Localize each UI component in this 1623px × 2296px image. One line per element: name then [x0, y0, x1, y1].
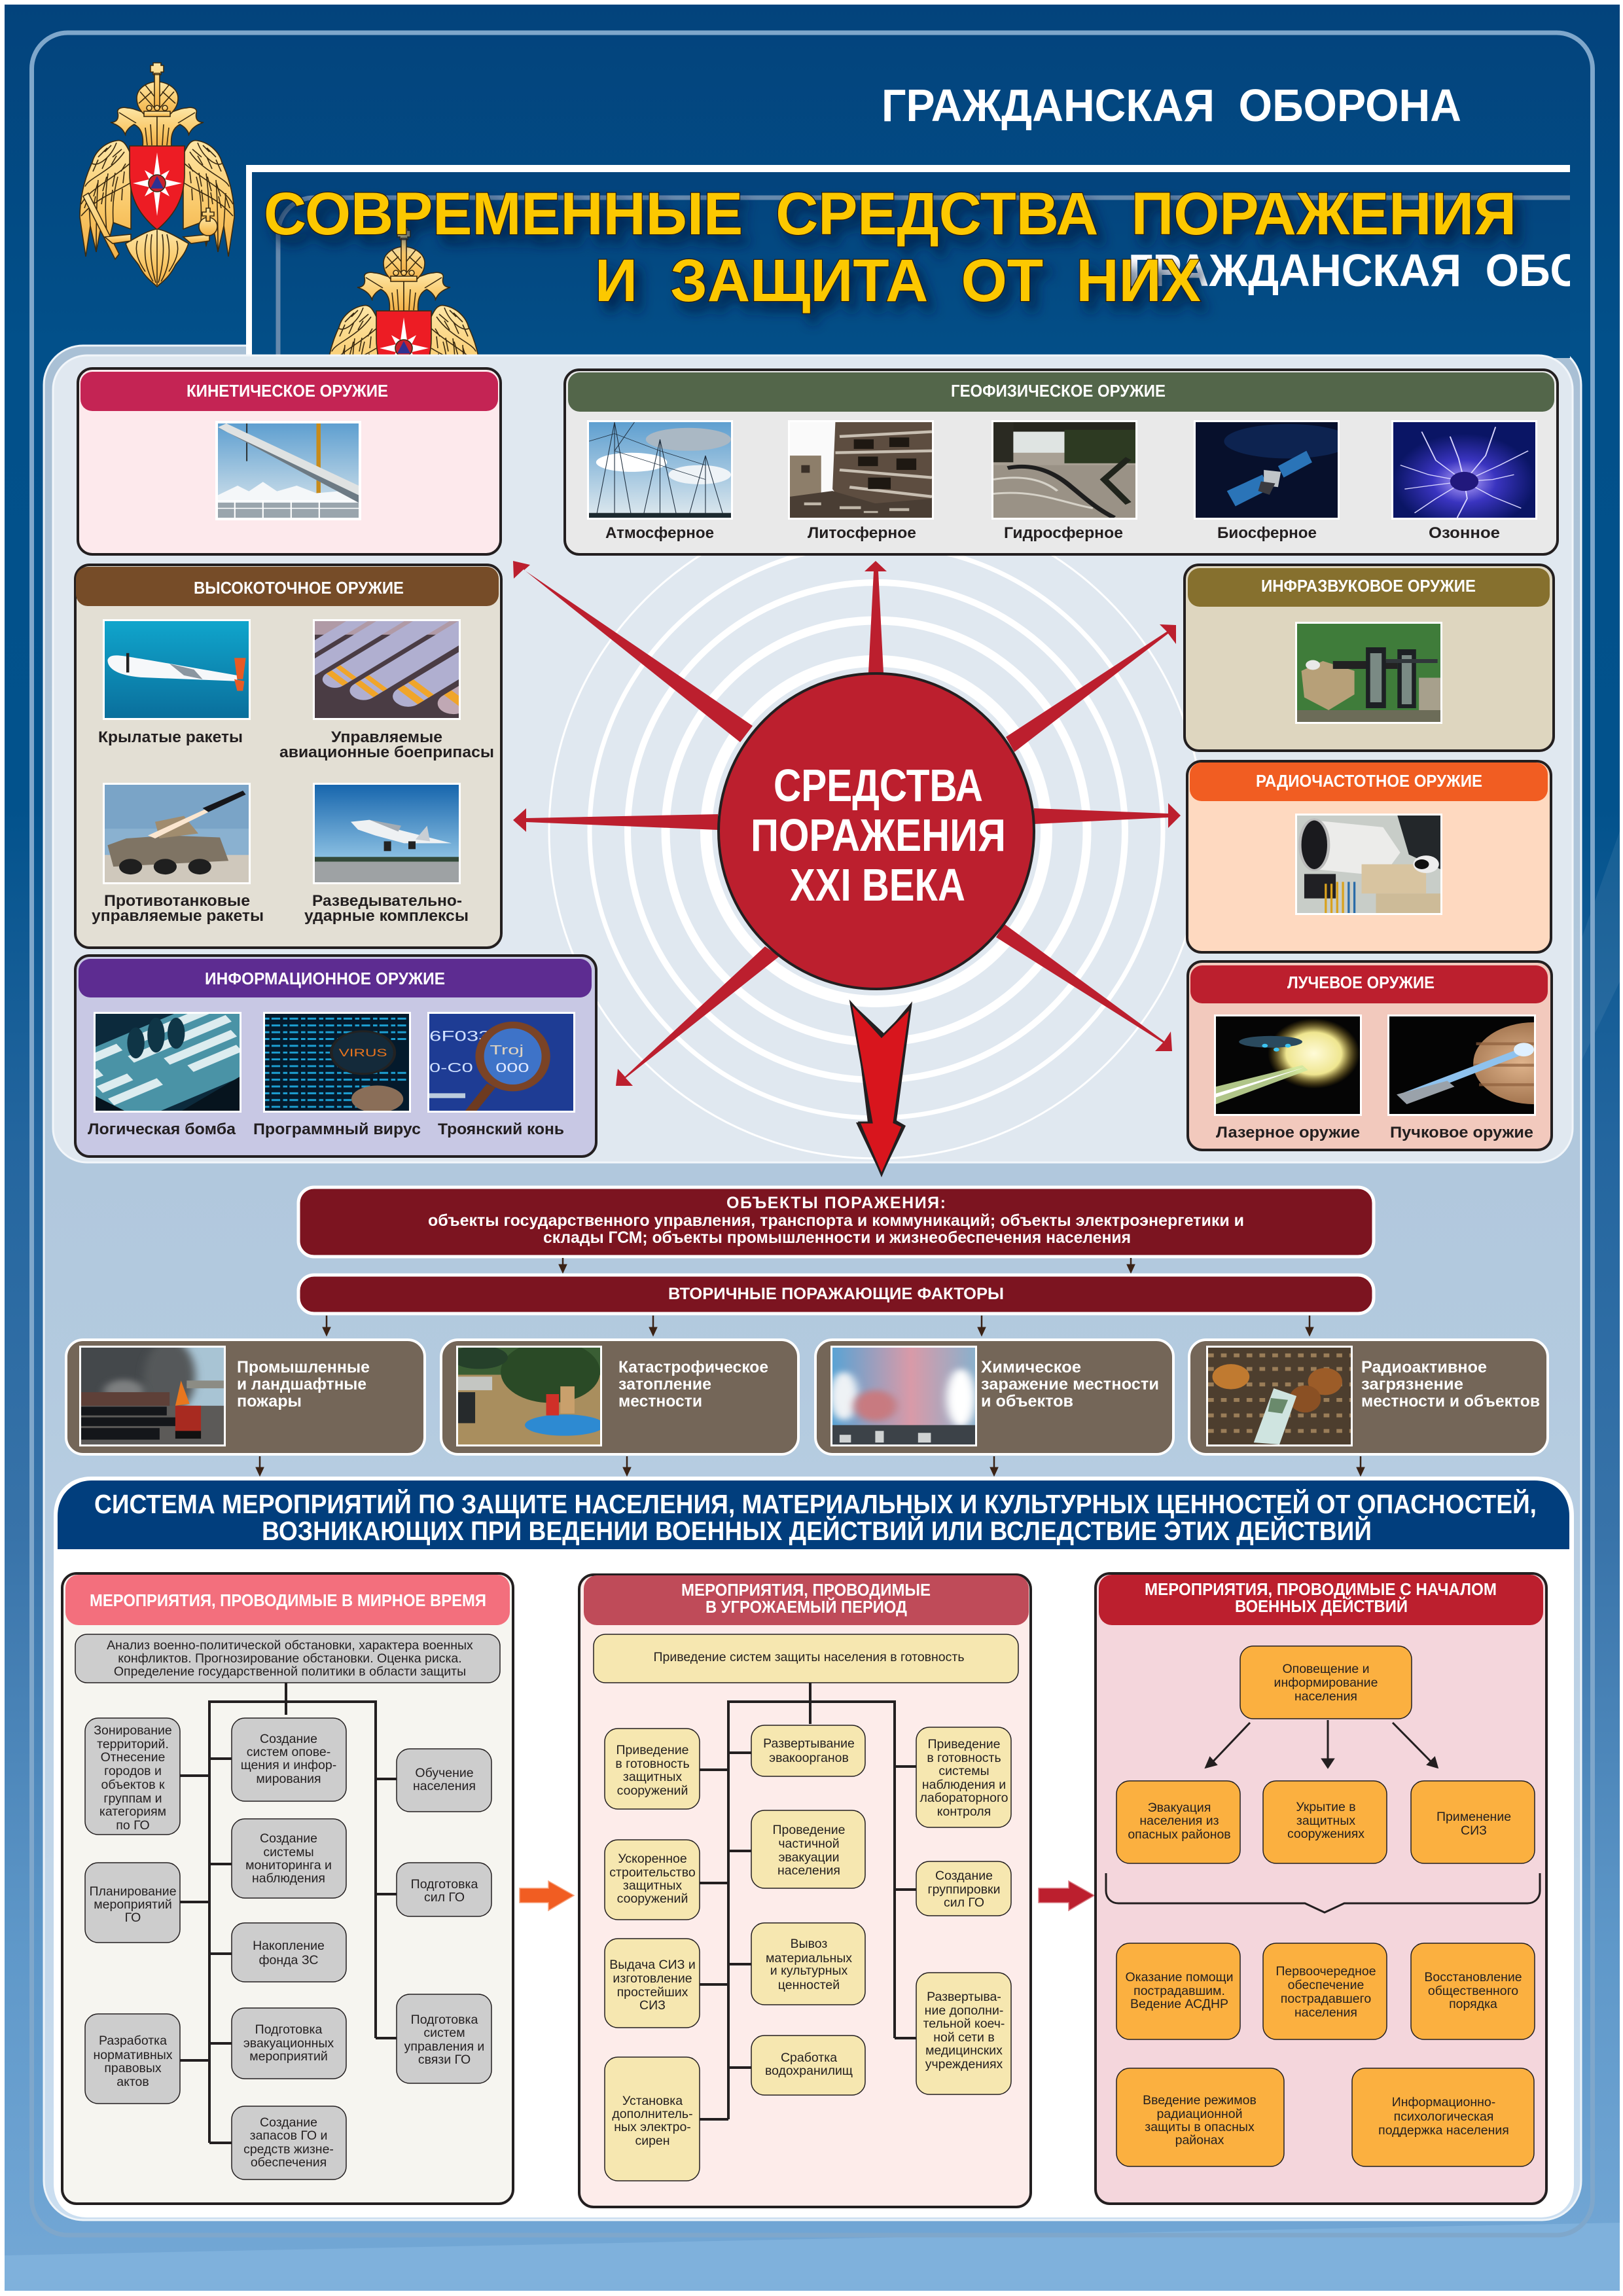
box: hospital beds: ние дополни- — [925, 2003, 1003, 2018]
box: psychological support: психологическая — [1394, 2109, 1493, 2124]
box: reservoirs: Сработка — [781, 2051, 837, 2065]
photo: flood — [451, 1341, 605, 1446]
box: control systems: управления и — [404, 2039, 484, 2054]
box: reservoirs: водохранилищ — [765, 2064, 853, 2078]
labels: high precision types: Управляемые — [331, 728, 442, 746]
labels: high precision types — [92, 728, 494, 925]
box: zoning: объектов к — [101, 1778, 165, 1792]
box: evacuation — [1116, 1781, 1240, 1863]
panel: wartime measures: МЕРОПРИЯТИЯ, ПРОВОДИМЫЕ С НАЧАЛОМ — [1145, 1579, 1497, 1599]
panel: information weapon — [52, 956, 596, 1157]
box: aid: Оказание помощи — [1125, 1970, 1234, 1984]
box: removal of valuables: материальных — [766, 1951, 852, 1965]
arrows to protection system — [256, 1456, 1364, 1476]
box: warning: Оповещение и — [1282, 1662, 1370, 1676]
card: chemical contamination: заражение местности — [981, 1375, 1159, 1393]
secondary factors box: ВТОРИЧНЫЕ ПОРАЖАЮЩИЕ ФАКТОРЫ — [668, 1285, 1004, 1303]
box: supply: населения — [1294, 2005, 1357, 2020]
arrows to secondary factors — [559, 1258, 1135, 1273]
labels: information types: Программный вирус — [253, 1121, 421, 1138]
arrow: south-west — [616, 946, 779, 1086]
heading: civil defence: ГРАЖДАНСКАЯ ОБОРОНА — [882, 80, 1461, 131]
box: protective equipment: простейших — [617, 1985, 688, 2000]
box: supply: обеспечение — [1288, 1978, 1364, 1992]
photo: trojan: 0-C0 — [429, 1060, 473, 1075]
box: evacuation: опасных районов — [1128, 1827, 1231, 1842]
box: reserves — [232, 2106, 346, 2179]
panel: geophysical weapon: ГЕОФИЗИЧЕСКОЕ ОРУЖИЕ — [951, 381, 1166, 401]
brace — [1106, 1873, 1540, 1912]
box: evacuation planning: эвакуационных — [243, 2036, 334, 2051]
box: evacuation planning: мероприятий — [249, 2049, 328, 2064]
panel: information weapon: ИНФОРМАЦИОННОЕ ОРУЖИЕ — [205, 969, 445, 988]
box: force training: Подготовка — [411, 1877, 478, 1892]
box: aid — [1116, 1943, 1240, 2039]
photo: anti-tank missile — [103, 783, 251, 884]
card: flooding: Катастрофическое — [618, 1358, 768, 1376]
panel: wartime measures: ВОЕННЫХ ДЕЙСТВИЙ — [1235, 1596, 1408, 1616]
photo: trojan — [427, 1012, 575, 1113]
labels: information types: Логическая бомба — [88, 1121, 236, 1138]
photo: software virus: VIRUS — [339, 1047, 387, 1059]
box: removal of valuables: Вывоз — [791, 1937, 827, 1951]
box: observation systems: лабораторного — [919, 1791, 1008, 1805]
box: control systems: систем — [423, 2026, 465, 2040]
photo: laser weapon — [1214, 1014, 1362, 1116]
box: analysis: Определение государственной политики в области защиты — [114, 1664, 466, 1679]
box: partial evacuation: населения — [777, 1863, 840, 1878]
panel: kinetic weapon: КИНЕТИЧЕСКОЕ ОРУЖИЕ — [187, 381, 388, 401]
box: zoning: категориям — [99, 1804, 166, 1819]
photo: biospheric — [1194, 420, 1352, 520]
box: warning systems: щения и инфор- — [241, 1758, 336, 1772]
labels: high precision types: Крылатые ракеты — [98, 728, 243, 746]
box: psychological support: поддержка населения — [1378, 2123, 1509, 2138]
box: population training: населения — [413, 1779, 476, 1793]
connectors — [700, 1683, 916, 2119]
box: analysis: Анализ военно-политической обстановки, характера военных — [107, 1638, 473, 1653]
labels: beam types: Лазерное оружие — [1216, 1124, 1360, 1141]
box: shelter: сооружениях — [1287, 1827, 1364, 1841]
photo: ozone — [1391, 420, 1537, 529]
panel: beam weapon: ЛУЧЕВОЕ ОРУЖИЕ — [1287, 973, 1435, 992]
box: public order: Восстановление — [1424, 1970, 1522, 1984]
central circle — [719, 673, 1034, 989]
box: planning — [85, 1863, 180, 1943]
box: accelerated construction — [605, 1840, 700, 1920]
panel: threat period measures: В УГРОЖАЕМЫЙ ПЕРИОД — [705, 1597, 907, 1617]
box: reserves: Создание — [260, 2115, 317, 2130]
photo: kinetic missile — [215, 421, 361, 520]
card: radioactive contamination — [1189, 1340, 1548, 1454]
civil defence emblem — [80, 63, 234, 287]
box: zoning: Отнесение — [101, 1750, 165, 1765]
box: monitoring: системы — [263, 1845, 314, 1859]
box: sirens: ных электро- — [614, 2120, 691, 2134]
box: population training: Обучение — [415, 1766, 474, 1780]
card: fires: Промышленные — [237, 1358, 370, 1376]
box: warning systems: Создание — [260, 1732, 317, 1746]
central circle: СРЕДСТВА — [774, 760, 983, 811]
main panel — [53, 355, 1573, 1162]
card: flooding — [441, 1340, 798, 1454]
box: public order: общественного — [1428, 1984, 1518, 1998]
card: radioactive contamination: местности и объектов — [1361, 1392, 1540, 1410]
box: legal acts: Разработка — [99, 2034, 167, 2048]
box: legal acts: нормативных — [93, 2048, 173, 2062]
box: radiation regimes — [1116, 2068, 1284, 2166]
labels: geophysical types — [605, 524, 1500, 542]
photo: trojan: 6F033 — [429, 1028, 491, 1044]
box: public order: порядка — [1449, 1997, 1497, 2011]
panel: geophysical weapon — [565, 370, 1558, 554]
box: evacuation: Эвакуация — [1148, 1801, 1211, 1815]
labels: high precision types: Разведывательно- — [312, 892, 462, 910]
box: shelter: защитных — [1296, 1814, 1355, 1828]
box: evacuation bodies: Развертывание — [763, 1736, 855, 1751]
box: observation systems: в готовность — [927, 1751, 1001, 1765]
box: sirens: сирен — [635, 2134, 670, 2148]
photo: atmospheric — [587, 420, 733, 520]
main title: СОВРЕМЕННЫЕ СРЕДСТВА ПОРАЖЕНИЯ — [264, 181, 1516, 247]
box: evacuation: населения из — [1139, 1814, 1219, 1828]
box: observation systems — [916, 1727, 1011, 1827]
box: warning systems: систем опове- — [247, 1745, 330, 1759]
photo: guided bombs — [268, 532, 613, 757]
box: aid: пострадавшим. — [1133, 1984, 1225, 1998]
box: removal of valuables: ценностей — [778, 1978, 840, 1992]
box: zoning: по ГО — [116, 1818, 150, 1833]
box: observation systems: наблюдения и — [922, 1778, 1006, 1792]
card: chemical contamination: и объектов — [981, 1392, 1073, 1410]
photo: trojan: 000 — [495, 1060, 529, 1075]
box: supply: пострадавшего — [1281, 1992, 1371, 2006]
box: force training: сил ГО — [424, 1890, 465, 1905]
box: psychological support — [1352, 2068, 1534, 2166]
box: force grouping: группировки — [928, 1882, 1000, 1897]
box: zoning: группам и — [103, 1791, 162, 1806]
box: hospital beds: тельной коеч- — [923, 2017, 1005, 2031]
arrow: south-east — [996, 924, 1172, 1051]
box: hospital beds — [916, 1973, 1011, 2094]
box: force training — [397, 1863, 491, 1916]
labels: beam types: Пучковое оружие — [1390, 1124, 1533, 1141]
panel: high precision weapon — [75, 532, 613, 948]
photo: keyboard — [52, 994, 283, 1131]
box: partial evacuation: частичной — [778, 1837, 840, 1851]
box: reserves: запасов ГО и — [250, 2128, 327, 2143]
box: force grouping: сил ГО — [944, 1895, 984, 1910]
card: radioactive contamination: Радиоактивное — [1361, 1358, 1487, 1376]
box: readiness: Приведение систем защиты населения в готовность — [653, 1650, 965, 1664]
box: zoning: территорий. — [97, 1737, 169, 1751]
box: planning: ГО — [125, 1910, 141, 1925]
box: partial evacuation: эвакуации — [778, 1850, 840, 1865]
photo: trojan: Troj — [490, 1042, 524, 1058]
box: accelerated construction: защитных — [623, 1878, 682, 1893]
box: planning: Планирование — [89, 1884, 177, 1899]
box: planning: мероприятий — [94, 1897, 172, 1912]
box: protective equipment use: СИЗ — [1461, 1823, 1487, 1838]
arrow: north-east — [1006, 624, 1176, 752]
box: partial evacuation — [751, 1810, 865, 1888]
labels: information types — [88, 1121, 564, 1138]
box: shelter: Укрытие в — [1296, 1800, 1356, 1814]
box: shelter — [1263, 1781, 1387, 1863]
photo: particle beam weapon — [1387, 1014, 1595, 1116]
photo: lithospheric — [788, 420, 934, 520]
box: shelter fund: фонда ЗС — [259, 1953, 318, 1967]
box: supply — [1263, 1943, 1387, 2039]
box: legal acts — [85, 2014, 180, 2104]
box: control systems: Подготовка — [411, 2013, 478, 2027]
central circle: XXI ВЕКА — [790, 859, 965, 910]
box: psychological support: Информационно- — [1392, 2095, 1495, 2109]
labels: information types: Троянский конь — [438, 1121, 564, 1138]
protection system banner — [58, 1480, 1569, 1549]
box: reservoirs — [751, 2036, 865, 2095]
box: protective equipment use: Применение — [1436, 1810, 1511, 1824]
box: shelter readiness — [605, 1729, 700, 1809]
panel: beam weapon — [1188, 961, 1595, 1150]
labels: high precision types: управляемые ракеты — [92, 907, 264, 925]
panel: wartime measures — [1096, 1573, 1546, 2204]
box: radiation regimes: радиационной — [1157, 2107, 1242, 2121]
card: fires: и ландшафтные — [237, 1375, 366, 1393]
box: shelter readiness: защитных — [623, 1770, 682, 1784]
box: observation systems: контроля — [937, 1804, 991, 1819]
photo: cruise missile — [103, 619, 251, 720]
box: radiation regimes: защиты в опасных — [1145, 2120, 1255, 2134]
protection system banner: ВОЗНИКАЮЩИХ ПРИ ВЕДЕНИИ ВОЕННЫХ ДЕЙСТВИЙ ИЛИ ВСЛЕДСТВИЕ ЭТИХ ДЕЙСТВИЙ — [262, 1516, 1372, 1546]
photo: hydrospheric — [991, 420, 1137, 520]
box: monitoring: Создание — [260, 1831, 317, 1846]
box: evacuation planning — [232, 2008, 346, 2079]
box: warning systems: мирования — [256, 1772, 321, 1786]
box: control systems — [397, 1994, 491, 2083]
objects of destruction box: ОБЪЕКТЫ ПОРАЖЕНИЯ: — [726, 1194, 946, 1212]
box: shelter fund — [232, 1923, 346, 1982]
box: radiation regimes: районах — [1175, 2133, 1224, 2147]
box: monitoring — [232, 1819, 346, 1898]
box: aid: Ведение АСДНР — [1130, 1997, 1228, 2011]
box: shelter readiness: Приведение — [616, 1743, 689, 1757]
panel: radio frequency weapon — [1187, 761, 1551, 952]
panel: radio frequency weapon: РАДИОЧАСТОТНОЕ ОРУЖИЕ — [1256, 771, 1482, 791]
box: monitoring: мониторинга и — [245, 1858, 332, 1873]
card: fires: пожары — [237, 1392, 302, 1410]
box: monitoring: наблюдения — [252, 1871, 325, 1886]
box: protective equipment: изготовление — [613, 1971, 692, 1986]
photo: industrial fire — [79, 1340, 226, 1446]
objects of destruction box: объекты государственного управления, транспорта и коммуникаций; объекты электроэнергетики и — [428, 1211, 1244, 1230]
box: reserves: средств жизне- — [243, 2142, 334, 2157]
box: shelter fund: Накопление — [253, 1939, 325, 1953]
box: protective equipment — [605, 1939, 700, 2028]
panel: infrasound weapon: ИНФРАЗВУКОВОЕ ОРУЖИЕ — [1261, 576, 1476, 596]
card: radioactive contamination: загрязнение — [1361, 1375, 1463, 1393]
box: partial evacuation: Проведение — [772, 1823, 846, 1837]
box: evacuation bodies: эвакоорганов — [769, 1751, 849, 1765]
arrow: threat period to wartime — [1039, 1881, 1094, 1910]
box: readiness — [594, 1634, 1018, 1683]
box: supply: Первоочередное — [1275, 1964, 1376, 1979]
panel: threat period measures — [579, 1575, 1031, 2207]
panel: infrasound weapon — [1185, 565, 1554, 751]
panel: peacetime measures — [62, 1573, 513, 2204]
box: warning: населения — [1294, 1689, 1357, 1704]
box: protective equipment: Выдача СИЗ и — [609, 1958, 696, 1972]
box: protective equipment: СИЗ — [639, 1998, 666, 2013]
box: hospital beds: учреждениях — [925, 2057, 1003, 2072]
box: warning — [1240, 1646, 1412, 1719]
box: removal of valuables — [751, 1923, 865, 2005]
arrow: north-west — [513, 561, 753, 742]
box: zoning: городов и — [104, 1764, 162, 1778]
card: fires — [66, 1340, 425, 1454]
photo: infrasound device — [1295, 622, 1442, 724]
labels: geophysical types: Атмосферное — [605, 524, 714, 542]
photo: reconnaissance strike complex — [313, 783, 461, 884]
labels: high precision types: ударные комплексы — [304, 907, 469, 925]
labels: geophysical types: Биосферное — [1217, 524, 1317, 542]
card: chemical contamination: Химическое — [981, 1358, 1081, 1376]
panel: kinetic weapon — [78, 368, 501, 554]
photo: dosimeter with mushrooms — [1206, 1346, 1353, 1446]
photo: radio frequency emitter — [1295, 814, 1442, 915]
labels: beam types — [1216, 1124, 1533, 1141]
box: evacuation planning: Подготовка — [255, 2022, 322, 2037]
box: removal of valuables: и культурных — [770, 1964, 847, 1978]
header panel with title — [246, 165, 1570, 358]
objects of destruction box: склады ГСМ; объекты промышленности и жизнеобеспечения населения — [543, 1229, 1131, 1247]
box: hospital beds: ной сети в — [933, 2030, 995, 2045]
labels: geophysical types: Гидросферное — [1004, 524, 1123, 542]
arrow: peacetime to threat period — [520, 1881, 574, 1910]
box: radiation regimes: Введение режимов — [1143, 2093, 1257, 2108]
main title: И ЗАЩИТА ОТ НИХ — [595, 247, 1201, 314]
box: reserves: обеспечения — [251, 2155, 327, 2170]
box: accelerated construction: сооружений — [617, 1892, 688, 1906]
arrow: west — [513, 808, 718, 832]
box: observation systems: Приведение — [927, 1737, 1001, 1751]
labels: high precision types: авиационные боеприпасы — [279, 744, 494, 761]
box: hospital beds: медицинских — [925, 2043, 1003, 2058]
card: flooding: местности — [618, 1392, 702, 1410]
connectors — [180, 1683, 397, 2143]
box: legal acts: правовых — [104, 2061, 162, 2075]
arrow: east — [1034, 803, 1181, 828]
photo: software virus — [263, 1012, 411, 1113]
box: force grouping — [916, 1861, 1011, 1916]
box: accelerated construction: Ускоренное — [618, 1852, 687, 1866]
box: zoning — [85, 1718, 180, 1835]
box: sirens: дополнитель- — [612, 2107, 693, 2121]
arrow: north — [865, 561, 887, 673]
box: legal acts: актов — [116, 2075, 149, 2089]
box: sirens — [605, 2057, 700, 2181]
objects of destruction box — [298, 1187, 1374, 1257]
card: chemical contamination — [815, 1340, 1173, 1454]
box: population training — [397, 1749, 491, 1812]
labels: geophysical types: Озонное — [1429, 524, 1500, 542]
box: sirens: Установка — [622, 2094, 683, 2108]
box: shelter readiness: сооружений — [617, 1784, 688, 1798]
arrows to factor cards — [323, 1316, 1313, 1336]
box: accelerated construction: строительство — [609, 1865, 696, 1880]
box: evacuation bodies — [751, 1725, 865, 1776]
box: force grouping: Создание — [935, 1869, 993, 1883]
central circle: ПОРАЖЕНИЯ — [751, 810, 1006, 861]
panel: threat period measures: МЕРОПРИЯТИЯ, ПРОВОДИМЫЕ — [681, 1580, 931, 1600]
big red arrow down — [851, 1001, 912, 1176]
box: protective equipment use — [1411, 1781, 1535, 1863]
labels: high precision types: Противотанковые — [104, 892, 250, 910]
box: control systems: связи ГО — [418, 2053, 471, 2067]
panel: peacetime measures: МЕРОПРИЯТИЯ, ПРОВОДИМЫЕ В МИРНОЕ ВРЕМЯ — [90, 1590, 486, 1610]
box: hospital beds: Развертыва- — [927, 1990, 1001, 2004]
arrows radiating from centre — [513, 561, 1181, 1086]
labels: geophysical types: Литосферное — [808, 524, 916, 542]
box: zoning: Зонирование — [94, 1723, 172, 1738]
card: flooding: затопление — [618, 1375, 711, 1393]
box: warning: информирование — [1274, 1676, 1378, 1690]
box: observation systems: системы — [938, 1764, 990, 1778]
arrows from warning box — [1206, 1720, 1437, 1767]
photo: chemical plume — [830, 1346, 977, 1446]
secondary factors box — [298, 1275, 1374, 1314]
box: analysis: конфликтов. Прогнозирование обстановки. Оценка риска. — [118, 1651, 462, 1666]
box: warning systems — [232, 1718, 346, 1801]
panel: high precision weapon: ВЫСОКОТОЧНОЕ ОРУЖИЕ — [194, 578, 404, 598]
protection system panel — [54, 1477, 1574, 2217]
main title — [264, 181, 1516, 314]
box: shelter readiness: в готовность — [615, 1757, 690, 1771]
box: public order — [1411, 1943, 1535, 2039]
box: analysis — [75, 1634, 500, 1683]
